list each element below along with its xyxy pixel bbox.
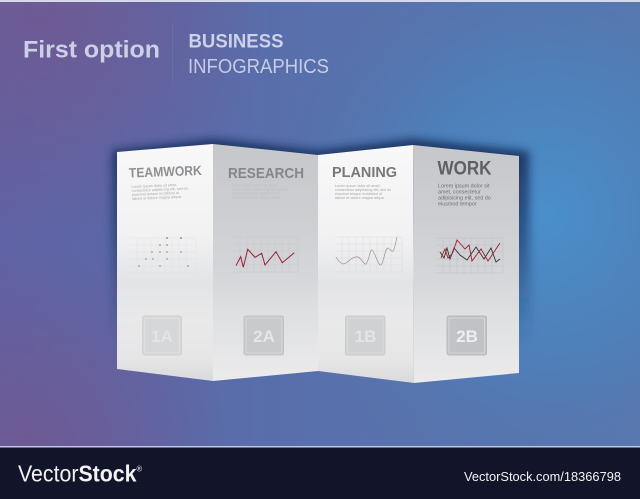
badge: 2B: 2B [456,327,478,346]
panel: research [213,144,318,381]
brochure shadow [112,139,530,345]
text block: work: adipisicing elit, sed do [438,196,491,202]
text block: research: consectetur adipisicing elit, sed do [232,188,288,192]
footer id: VectorStock.com/18366798 [464,469,621,484]
text block: planing: Lorem ipsum dolor sit amet, [335,184,380,188]
text block: planing: labore et dolore magna aliqua. [335,196,385,200]
badge: 2B [447,316,486,355]
footer bar [0,446,640,499]
chart: two lines [436,238,503,274]
header title: First option: First option [23,36,160,64]
panel: work [413,145,519,383]
text block: research: eiusmod tempor incididunt ut [232,192,279,196]
text block: planing: consectetur adipisicing elit, sed do [335,188,391,192]
badge: 1A: 1A [151,327,173,346]
badge: 1B: 1B [355,327,376,346]
text block: research [232,184,288,200]
text block: planing [335,184,391,200]
text block: work: amet, consectetur [438,190,481,196]
text block: research: labore et dolore magna aliqua. [232,196,282,200]
footer logo: VectorStock: VectorStock [18,460,141,486]
badge: 1A [142,316,182,355]
heading: planing: PLANING [332,165,397,181]
footer logo: VectorStock: ® [137,464,142,474]
text block: work: eiusmod tempor [438,202,477,208]
header subtitle [172,24,329,82]
header subtitle: BUSINESS [188,30,284,52]
text block: teamwork [131,183,188,201]
folded brochure [117,144,519,383]
text block: teamwork: labore et dolore magna aliqua. [132,195,182,201]
heading: research: RESEARCH [228,165,304,182]
heading: teamwork: TEAMWORK [129,163,202,180]
text block: work [438,184,491,208]
panel: planing [318,145,414,383]
header subtitle: INFOGRAPHICS [188,55,329,78]
chart: red line [233,237,298,273]
badge: 1B [346,316,385,355]
panel: teamwork [117,144,213,381]
badge: 2A [244,316,284,355]
text block: planing: eiusmod tempor incididunt ut [335,192,382,196]
text block: teamwork: consectetur adipisicing elit, sed do [132,187,188,193]
chart: smooth line [335,237,402,273]
badge: 2A: 2A [253,327,275,346]
heading: work: WORK [438,158,492,180]
text block: work: Lorem ipsum dolor sit [438,184,490,190]
chart: dot plot [130,237,196,274]
text block: teamwork: eiusmod tempor incididunt ut [132,191,179,197]
text block: research: Lorem ipsum dolor sit amet, [232,184,278,188]
text block: teamwork: Lorem ipsum dolor sit amet, [131,183,177,189]
